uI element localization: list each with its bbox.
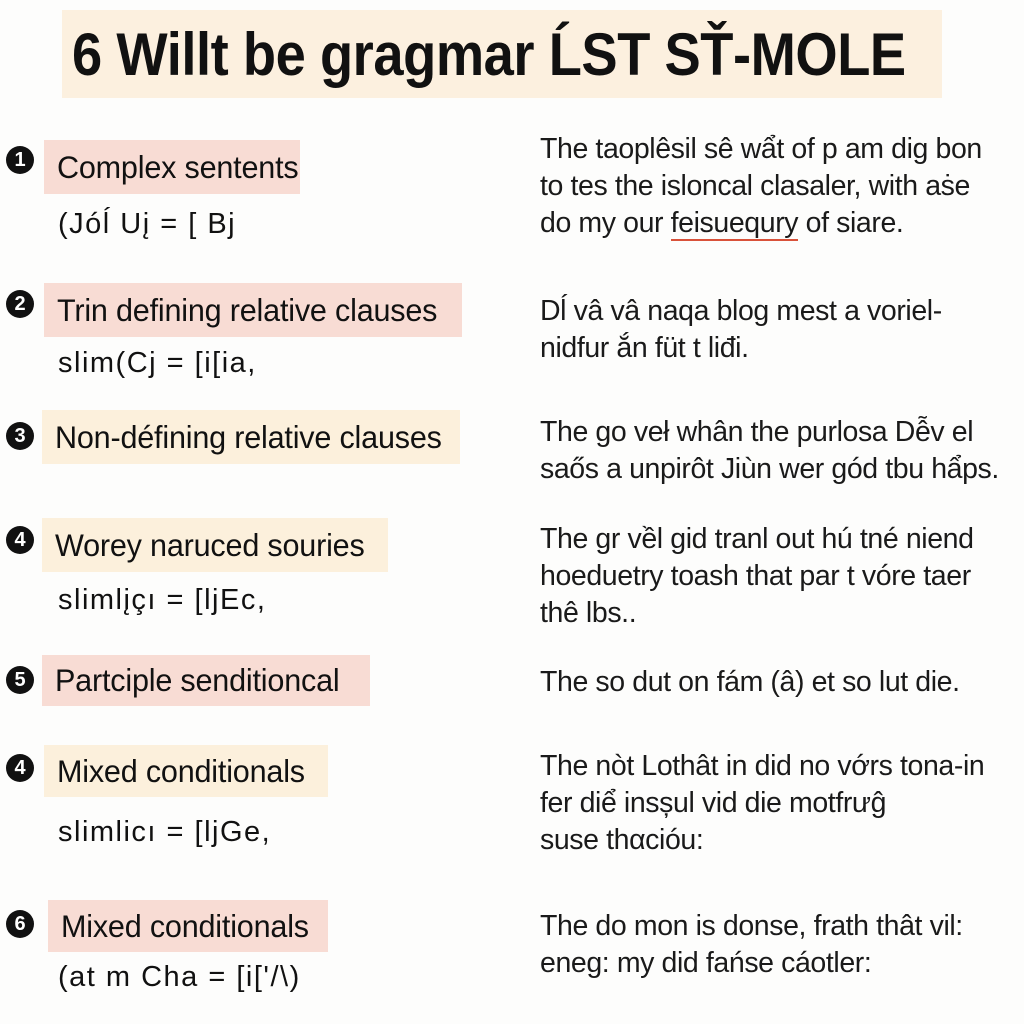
text 6: The nòt Lothât in did no vớrs tona-in bbox=[540, 750, 984, 782]
number 2: 2 bbox=[14, 293, 26, 315]
text 6 bbox=[540, 750, 984, 856]
text 2 bbox=[540, 294, 942, 364]
heading 6: Mixed conditionals bbox=[57, 752, 305, 788]
formula 7: (at m Cha = [i['/\) bbox=[58, 961, 301, 993]
number 2 bbox=[6, 290, 34, 318]
text 3: The go veł whân the purlosa Dễv el bbox=[540, 416, 973, 448]
formula 6: slimlicı = [ljGe, bbox=[58, 816, 271, 848]
number 5 bbox=[6, 666, 34, 694]
heading 1 bbox=[44, 140, 300, 194]
heading 2: Trin defining relative clauses bbox=[57, 292, 437, 328]
formula 4: slimlįçı = [ljEc, bbox=[58, 584, 266, 616]
text 4 bbox=[540, 523, 974, 629]
heading 7 bbox=[48, 900, 328, 952]
text 7 bbox=[540, 910, 963, 979]
formula 2: slim(Cj = [i[ia, bbox=[58, 347, 257, 379]
text 1: do my our feisuequry of siare. bbox=[540, 207, 903, 239]
heading 6 bbox=[44, 745, 328, 797]
number 7: 6 bbox=[14, 913, 26, 935]
number 6 bbox=[6, 754, 34, 782]
text 4: thê Ɩbs.. bbox=[540, 597, 636, 629]
heading 7: Mixed conditionals bbox=[61, 908, 309, 944]
number 4 bbox=[6, 526, 34, 554]
heading 4 bbox=[42, 518, 388, 572]
title: 6 Willt be gragmar ĹST SŤ-MOLE bbox=[72, 20, 906, 88]
text 2: nidfur ắn füt t liđi. bbox=[540, 332, 749, 364]
heading 5: Partciple senditioncal bbox=[55, 662, 339, 698]
text 2: Dĺ vâ vâ naqa blog mest a voriel- bbox=[540, 295, 942, 327]
number 6: 4 bbox=[14, 757, 26, 779]
text 7: The do mon is donse, frath thât vil: bbox=[540, 910, 963, 942]
heading 1: Complex sentents bbox=[57, 148, 298, 184]
number 1 bbox=[6, 146, 34, 174]
text 1: The taoplêsil sê wẩt of p am dig bon bbox=[540, 133, 982, 165]
text 6: suse thαcióu: bbox=[540, 824, 703, 856]
text 7: eneg: my did fańse cáotler: bbox=[540, 947, 871, 979]
text 1: to tes the islоncal clasaler, with aṡe bbox=[540, 170, 970, 202]
number 3 bbox=[6, 422, 34, 450]
text 5: The so dut on fám (â) et so lut die. bbox=[540, 666, 960, 698]
heading 3 bbox=[42, 410, 460, 464]
text 3: saős a unpirôt Jiùn wer gód tbu hẩps. bbox=[540, 453, 999, 485]
number 5: 5 bbox=[14, 669, 26, 691]
number 3: 3 bbox=[14, 425, 26, 447]
number 4: 4 bbox=[14, 529, 26, 551]
heading 3: Non-défining relative clauses bbox=[55, 418, 442, 454]
text 6: fer diể insșul vid die motfrưĝ bbox=[540, 787, 886, 819]
text 4: The gr vềl gid tranl out hú tné niend bbox=[540, 523, 974, 555]
heading 5 bbox=[42, 655, 370, 706]
number 7 bbox=[6, 910, 34, 938]
number 1: 1 bbox=[14, 149, 26, 171]
formula 1: (Jóĺ Uį = [ Bj bbox=[58, 208, 236, 240]
heading 2 bbox=[44, 283, 462, 337]
text 4: hoeduetry toash that par t vóre taer bbox=[540, 560, 971, 592]
heading 4: Worey naruced souries bbox=[55, 526, 365, 562]
text 3 bbox=[540, 416, 999, 485]
text 1 bbox=[540, 133, 982, 241]
